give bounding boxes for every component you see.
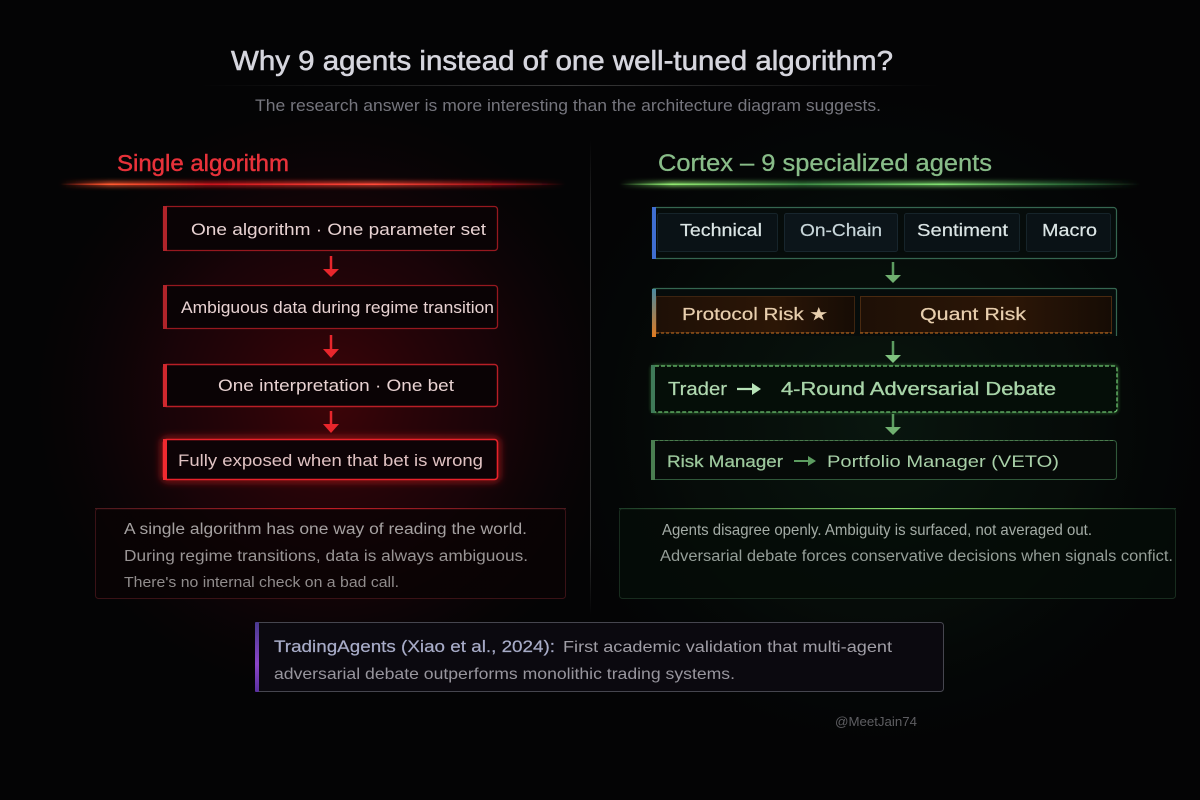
note: cortex: Agents disagree openly. Ambiguity is surfaced, not averaged out. — [662, 522, 1092, 539]
note: single algorithm: A single algorithm has one way of reading the world. — [124, 521, 527, 538]
title: Why 9 agents instead of one well-tuned algorithm? — [231, 45, 893, 76]
row: trader debate: 4-Round Adversarial Debate — [781, 379, 1056, 399]
panel: cortex — [619, 150, 1176, 598]
step: ambiguous data: Ambiguous data during regime transition — [181, 298, 494, 317]
arrow — [885, 341, 901, 363]
row: risk agents: Quant Risk — [920, 304, 1026, 324]
heading: cortex — [620, 150, 1140, 186]
callout: tradingagents citation — [255, 622, 944, 692]
arrow — [885, 414, 901, 435]
step: one interpretation: One interpretation · One bet — [218, 376, 454, 395]
row: analyst agents: Sentiment — [917, 220, 1008, 240]
step: ambiguous data — [163, 285, 498, 329]
arrow — [885, 262, 901, 283]
step: fully exposed — [163, 439, 498, 480]
row: analyst agents: Macro — [1042, 220, 1097, 240]
note: single algorithm: During regime transitions, data is always ambiguous. — [124, 548, 528, 565]
row: risk manager — [651, 440, 1116, 480]
arrow — [323, 256, 339, 277]
note: cortex — [619, 508, 1176, 598]
panel: single algorithm — [60, 150, 566, 598]
step: one algorithm: One algorithm · One parameter set — [191, 220, 486, 239]
heading: single algorithm: Single algorithm — [117, 150, 289, 176]
step: one interpretation — [163, 364, 498, 407]
step: one algorithm — [163, 206, 498, 251]
row: risk manager: Portfolio Manager (VETO) — [827, 452, 1059, 471]
arrow — [323, 411, 339, 433]
row: risk agents — [652, 288, 1116, 337]
arrow — [323, 335, 339, 358]
row: analyst agents: Technical — [680, 220, 762, 240]
heading: single algorithm — [60, 150, 565, 186]
row: trader debate — [651, 365, 1117, 413]
row: risk agents: Protocol Risk ★ — [682, 304, 828, 324]
note: single algorithm — [95, 508, 566, 598]
callout: tradingagents citation: TradingAgents (Xiao et al., 2024): — [274, 637, 555, 656]
note: cortex: Adversarial debate forces conservative decisions when signals confict. — [660, 548, 1173, 565]
row: risk manager: Risk Manager — [667, 452, 783, 471]
watermark: @MeetJain74 — [835, 714, 917, 729]
row: analyst agents — [652, 207, 1116, 259]
row: analyst agents: On-Chain — [800, 220, 882, 240]
step: fully exposed: Fully exposed when that bet is wrong — [178, 451, 483, 470]
subtitle: The research answer is more interesting than the architecture diagram suggests. — [255, 96, 881, 115]
callout: tradingagents citation: First academic validation that multi-agent — [563, 639, 893, 656]
callout: tradingagents citation: adversarial debate outperforms monolithic trading systems. — [274, 666, 735, 683]
heading: cortex: Cortex – 9 specialized agents — [658, 150, 992, 177]
row: trader debate: Trader — [668, 379, 727, 399]
note: single algorithm: There's no internal check on a bad call. — [124, 575, 399, 591]
